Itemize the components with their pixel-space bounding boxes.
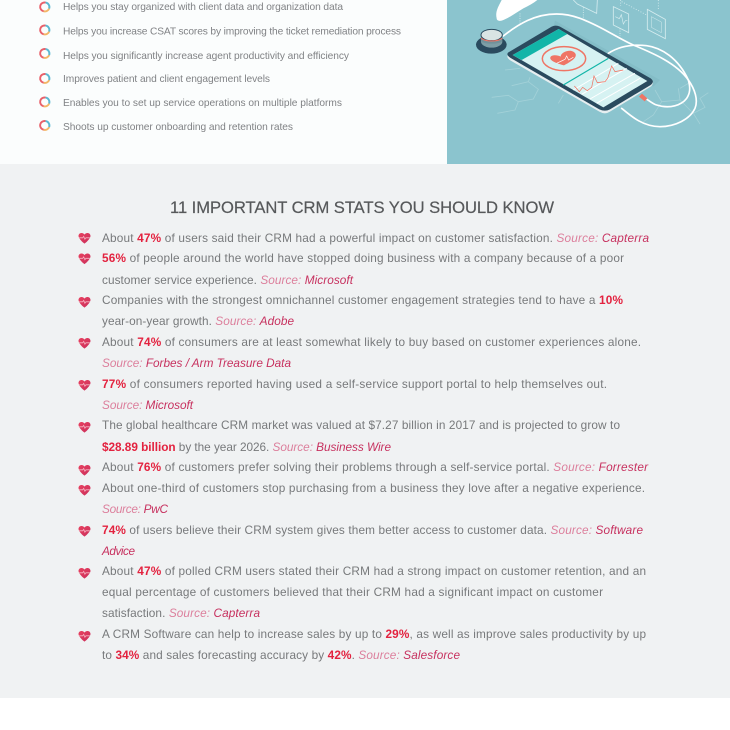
stat 5: 77% of consumers reported having used a self-service support portal to help themselves out. [102, 377, 607, 391]
teal header bar [513, 29, 567, 60]
stat 10: About 47% of polled CRM users stated their CRM had a strong impact on customer retention, and an [102, 564, 646, 578]
stat 6 [78, 418, 620, 454]
stat 3 [78, 293, 624, 328]
benefit item 1: Helps you stay organized with client data and organization data [63, 2, 343, 13]
phone shadow [553, 21, 660, 87]
stat 10: satisfaction. Source: Capterra [102, 606, 260, 620]
stat 3: year-on-year growth. Source: Adobe [102, 314, 294, 328]
benefit item 5: Enables you to set up service operations on multiple platforms [63, 98, 342, 109]
stat 1: About 47% of users said their CRM had a powerful impact on customer satisfaction. Source: Capterra [102, 231, 649, 245]
heading: 11 IMPORTANT CRM STATS YOU SHOULD KNOW [170, 198, 554, 217]
stat 9: Advice [101, 544, 135, 558]
stethoscope chest piece [476, 36, 507, 54]
stats list [78, 231, 649, 662]
cloud [496, 0, 537, 21]
stat 5 [78, 377, 607, 412]
stat 2: 56% of people around the world have stopped doing business with a company because of a poor [102, 251, 624, 265]
stat 2: customer service experience. Source: Microsoft [102, 273, 354, 287]
heart [550, 51, 576, 65]
stat 2 [78, 251, 624, 287]
plug [639, 94, 647, 101]
stat 7: About 76% of customers prefer solving their problems through a self-service portal. Source: Forrester [102, 460, 649, 474]
stat 8 [78, 481, 645, 516]
stat 3: Companies with the strongest omnichannel customer engagement strategies tend to have a 10% [102, 293, 624, 307]
stat 4: Source: Forbes / Arm Treasure Data [102, 356, 291, 370]
benefits list [40, 2, 401, 133]
teal divider [563, 58, 608, 85]
stat 10 [78, 564, 646, 620]
stat 4: About 74% of consumers are at least somewhat likely to buy based on customer experiences alone. [102, 335, 641, 349]
stat 6: The global healthcare CRM market was valued at $7.27 billion in 2017 and is projected to grow to [102, 418, 620, 432]
stat 5: Source: Microsoft [102, 398, 194, 412]
stethoscope tube [503, 14, 696, 127]
benefit item 3: Helps you significantly increase agent productivity and efficiency [63, 51, 350, 62]
benefit item 2: Helps you increase CSAT scores by improving the ticket remediation process [63, 26, 401, 38]
panel: benefits list background [0, 0, 447, 164]
stat 8: About one-third of customers stop purchasing from a business they love after a negative experience. [102, 481, 645, 495]
stat 9 [78, 523, 643, 558]
stat 11 [78, 627, 646, 662]
stat 4 [78, 335, 641, 370]
benefit item 4: Improves patient and client engagement levels [63, 74, 270, 85]
ecg stripes [573, 63, 640, 103]
stat 11: A CRM Software can help to increase sales by up to 29%, as well as improve sales productivity by up [102, 627, 646, 641]
stat 11: to 34% and sales forecasting accuracy by 42%. Source: Salesforce [102, 648, 460, 662]
stat 9: 74% of users believe their CRM system gives them better access to customer data. Source: Software [102, 523, 643, 537]
benefit item 6: Shoots up customer onboarding and retention rates [63, 122, 293, 133]
floating icons [520, 0, 665, 39]
ecg line [574, 66, 623, 92]
panel: CRM stats [0, 164, 730, 698]
molecule lines [492, 68, 708, 124]
stat 10: equal percentage of customers believed that their CRM had a significant impact on customer [102, 585, 603, 599]
phone screen [513, 29, 647, 107]
phone body [507, 26, 653, 113]
illustration: smartphone with stethoscope [447, 0, 730, 164]
stat 8: Source: PwC [102, 502, 168, 516]
stat 6: $28.89 billion by the year 2026. Source: Business Wire [102, 440, 391, 454]
heart circle [542, 47, 586, 71]
